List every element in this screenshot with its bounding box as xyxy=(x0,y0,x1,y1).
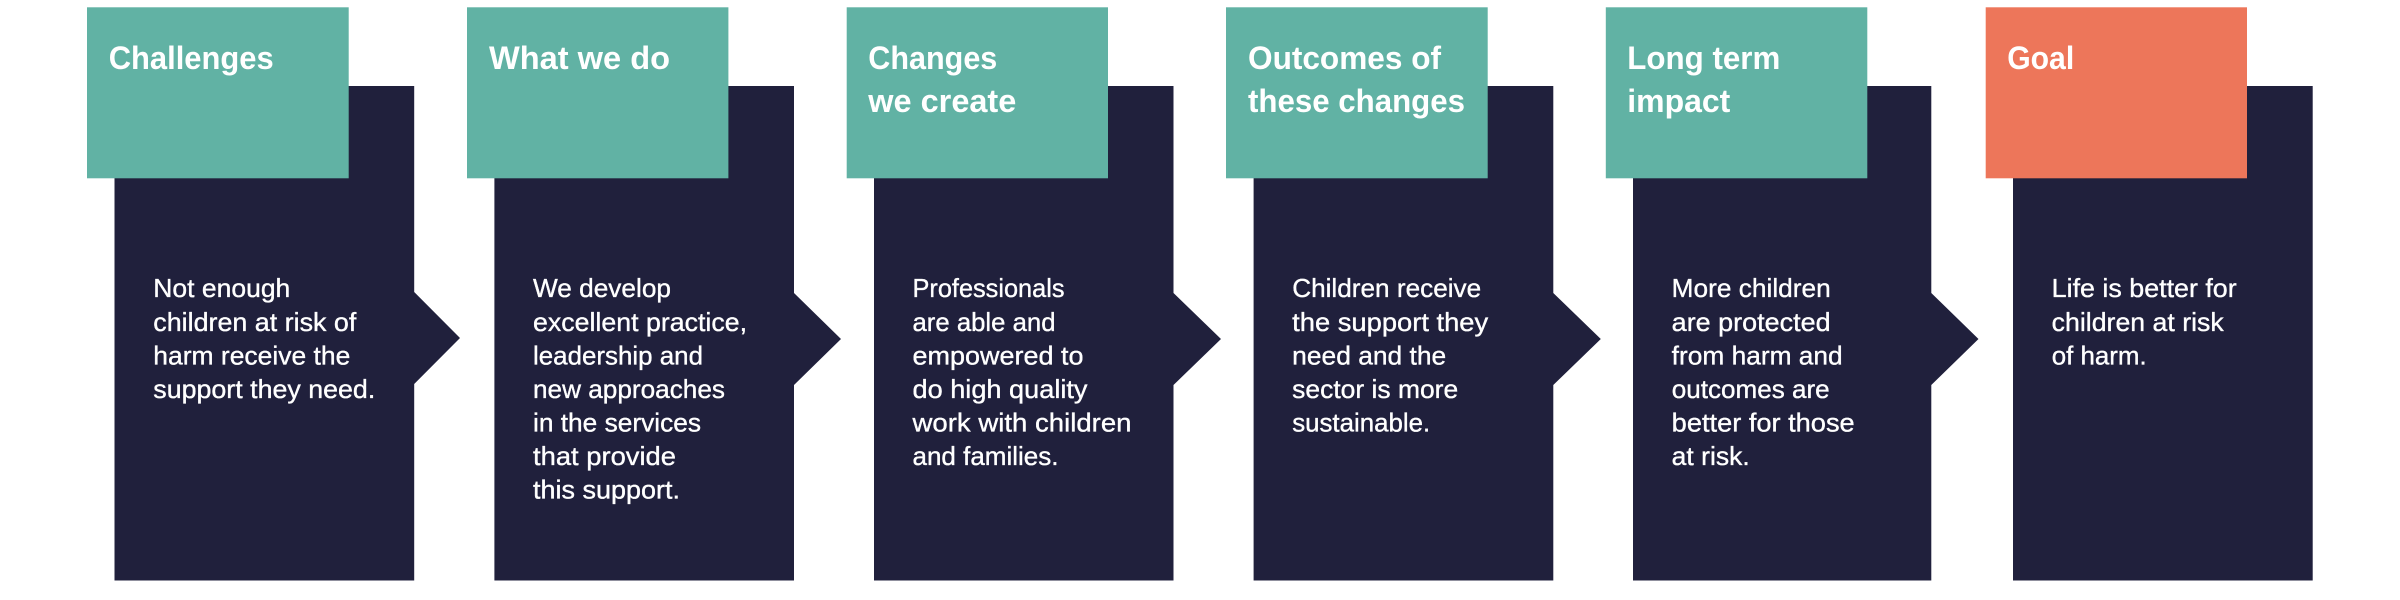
body text: goal: Life is better for xyxy=(2052,273,2237,303)
header box: changes we create xyxy=(847,7,1108,178)
body text: long term impact xyxy=(1672,273,1855,471)
header box: long term impact xyxy=(1606,7,1867,178)
header box: challenges xyxy=(87,7,349,178)
panel: challenges xyxy=(87,7,460,581)
heading: long term impact xyxy=(1627,40,1780,119)
heading: changes we create: we create xyxy=(867,83,1016,119)
body text: long term impact: outcomes are xyxy=(1672,374,1830,404)
body text: changes we create: are able and xyxy=(912,307,1056,337)
panel: goal xyxy=(1986,7,2313,581)
dark card with arrow: what we do xyxy=(494,86,841,580)
body text: challenges xyxy=(153,273,375,404)
body text: what we do: leadership and xyxy=(533,340,703,370)
heading: changes we create xyxy=(867,40,1016,119)
panel: changes we create xyxy=(847,7,1221,581)
body text: outcomes: Children receive xyxy=(1292,273,1481,303)
body text: outcomes: sustainable. xyxy=(1292,408,1430,438)
dark card with arrow: long term impact xyxy=(1633,86,1978,580)
heading: changes we create: Changes xyxy=(868,40,997,76)
panel: what we do xyxy=(467,7,841,581)
body text: goal xyxy=(2052,273,2237,370)
header box: what we do xyxy=(467,7,728,178)
body text: goal: children at risk xyxy=(2052,307,2225,337)
body text: long term impact: better for those xyxy=(1672,408,1855,438)
panel: long term impact xyxy=(1606,7,1978,581)
body text: what we do: excellent practice, xyxy=(533,307,747,337)
body text: changes we create xyxy=(911,273,1132,471)
body text: long term impact: More children xyxy=(1672,273,1831,303)
heading: long term impact: Long term xyxy=(1627,40,1780,76)
heading: outcomes: Outcomes of xyxy=(1248,40,1441,76)
panel: outcomes of these changes xyxy=(1226,7,1601,581)
body text: what we do: this support. xyxy=(533,474,680,504)
header box: goal xyxy=(1986,7,2247,178)
dark card with arrow: outcomes xyxy=(1254,86,1601,580)
body text: what we do xyxy=(533,273,747,504)
body text: changes we create: and families. xyxy=(912,441,1058,471)
body text: outcomes: sector is more xyxy=(1292,374,1458,404)
heading: goal: Goal xyxy=(2007,40,2074,76)
heading: challenges: Challenges xyxy=(109,40,274,76)
body text: changes we create: Professionals xyxy=(912,273,1064,303)
body text: what we do: new approaches xyxy=(533,374,725,404)
dark card with arrow: changes we create xyxy=(874,86,1221,580)
heading: what we do: What we do xyxy=(489,40,670,76)
body text: challenges: harm receive the xyxy=(153,340,350,370)
header box: outcomes xyxy=(1226,7,1488,178)
body text: outcomes: need and the xyxy=(1292,340,1446,370)
body text: what we do: in the services xyxy=(533,408,701,438)
body text: changes we create: work with children xyxy=(911,408,1132,438)
heading: outcomes: these changes xyxy=(1248,83,1465,119)
body text: outcomes: the support they xyxy=(1292,307,1488,337)
body text: challenges: children at risk of xyxy=(153,307,357,337)
dark card: goal xyxy=(2013,86,2313,580)
body text: challenges: Not enough xyxy=(153,273,290,303)
body text: changes we create: do high quality xyxy=(912,374,1088,404)
body text: long term impact: are protected xyxy=(1672,307,1831,337)
body text: goal: of harm. xyxy=(2052,340,2147,370)
dark card with arrow: challenges xyxy=(114,86,460,580)
body text: changes we create: empowered to xyxy=(912,340,1084,370)
body text: what we do: that provide xyxy=(533,441,676,471)
heading: outcomes xyxy=(1248,40,1465,119)
body text: outcomes xyxy=(1292,273,1488,438)
body text: what we do: We develop xyxy=(533,273,671,303)
body text: long term impact: from harm and xyxy=(1672,340,1843,370)
body text: challenges: support they need. xyxy=(153,374,375,404)
heading: long term impact: impact xyxy=(1627,83,1731,119)
body text: long term impact: at risk. xyxy=(1672,441,1750,471)
